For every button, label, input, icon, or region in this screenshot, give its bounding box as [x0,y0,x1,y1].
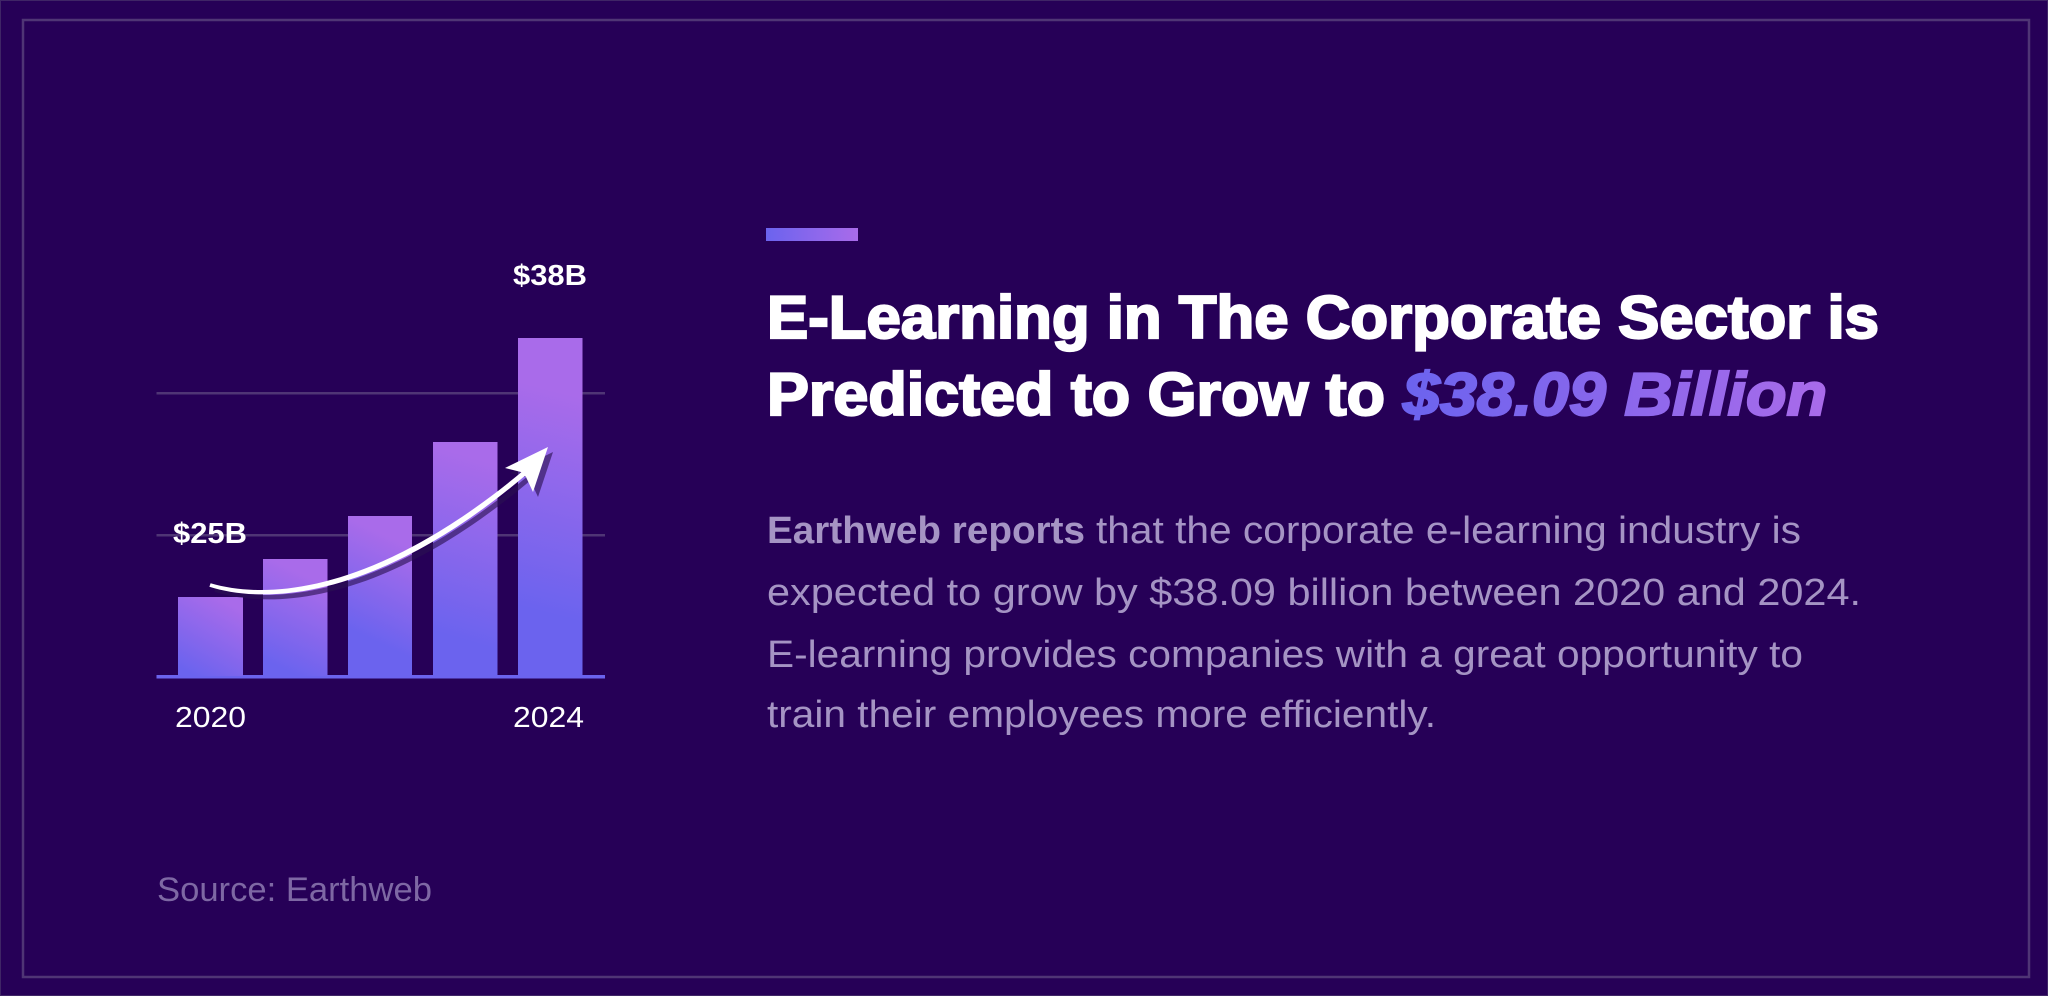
body text [767,510,1861,736]
label: 2024: 2024 [513,702,584,734]
body text: expected to grow by $38.09 billion between 2020 and 2024. [767,572,1861,614]
arrow shadow [214,452,553,599]
accent rule [766,228,858,241]
growth arrow [209,447,548,594]
title: Predicted to Grow to [767,361,1385,428]
title highlight: $38.09 Billion [1402,361,1827,428]
label: $38B: $38B [513,260,587,292]
body text: train their employees more efficiently. [767,694,1436,736]
body text: E-learning provides companies with a great opportunity to [767,634,1803,676]
title [767,284,1879,428]
title: E-Learning in The Corporate Sector is [767,284,1879,351]
body text: that the corporate e-learning industry is [1096,510,1801,552]
source: Source: Earthweb [157,871,432,909]
label: $25B: $25B [173,518,247,550]
body text: Earthweb reports [767,510,1085,552]
label: 2020: 2020 [175,702,246,734]
bars [178,338,582,676]
bar chart [156,260,605,734]
